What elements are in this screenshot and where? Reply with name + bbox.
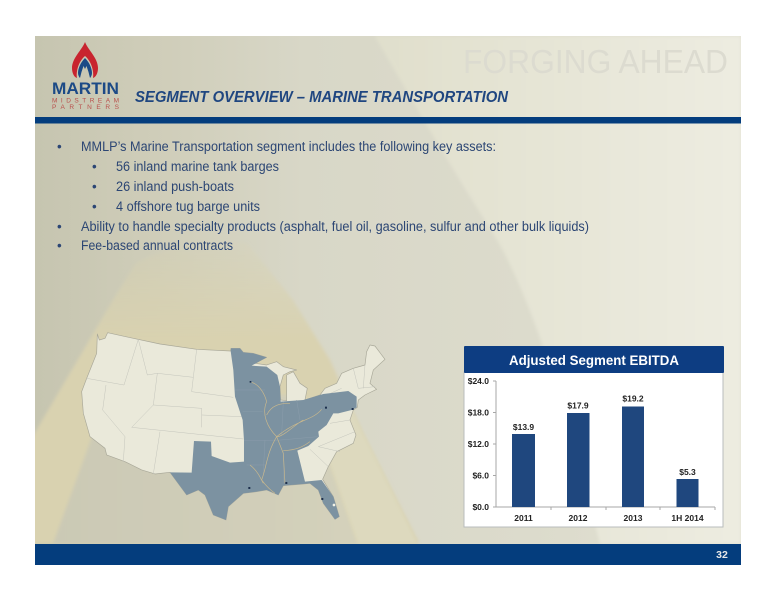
category labels: 1H 2014 bbox=[671, 513, 704, 523]
value labels bbox=[513, 394, 696, 477]
map: served states bbox=[170, 348, 357, 520]
bullet 2: Ability to handle specialty products (asphalt, fuel oil, gasoline, sulfur and other bulk liquids) bbox=[81, 219, 589, 234]
logo wordmark: MARTIN bbox=[52, 80, 119, 98]
sub-bullet 3: • bbox=[92, 199, 97, 214]
page number: 32 bbox=[716, 549, 728, 561]
axes bbox=[493, 381, 715, 510]
category labels bbox=[514, 513, 704, 523]
bullet list bbox=[57, 139, 589, 253]
y axis labels: $18.0 bbox=[468, 408, 489, 418]
chart background bbox=[464, 372, 723, 527]
map: contiguous US bbox=[82, 333, 385, 520]
sub-bullet 1: • bbox=[92, 159, 97, 174]
value labels: $19.2 bbox=[622, 394, 644, 404]
watermark title: FORGING AHEAD bbox=[463, 43, 728, 80]
bullet 3: Fee-based annual contracts bbox=[81, 238, 233, 253]
sub-bullet 2: • bbox=[92, 179, 97, 194]
bullet 2: • bbox=[57, 219, 62, 234]
y axis labels: $0.0 bbox=[472, 502, 489, 512]
map: state lines bbox=[87, 339, 375, 474]
logo subtitle line 2: PARTNERS bbox=[52, 104, 120, 111]
heading: SEGMENT OVERVIEW – MARINE TRANSPORTATION bbox=[135, 89, 508, 106]
bullet 1: MMLP’s Marine Transportation segment includes the following key assets: bbox=[81, 139, 496, 154]
logo bbox=[52, 42, 120, 111]
chart header bbox=[464, 346, 724, 373]
value labels: $17.9 bbox=[567, 400, 589, 410]
category labels: 2011 bbox=[514, 513, 533, 523]
sub-bullet 2: 26 inland push-boats bbox=[116, 179, 234, 194]
footer bar bbox=[35, 544, 741, 565]
value labels: $13.9 bbox=[513, 422, 534, 432]
y axis labels: $24.0 bbox=[468, 376, 489, 386]
map: white marker bbox=[333, 504, 335, 506]
map: waterways bbox=[250, 382, 322, 493]
map: state lines in served area bbox=[235, 390, 318, 483]
map: terminal markers bbox=[248, 381, 354, 500]
icon: flame bbox=[72, 42, 98, 78]
y axis labels: $12.0 bbox=[468, 439, 489, 449]
bars bbox=[512, 406, 698, 507]
y axis labels: $6.0 bbox=[472, 470, 489, 480]
sub-bullet 3: 4 offshore tug barge units bbox=[116, 199, 260, 214]
value labels: $5.3 bbox=[679, 467, 696, 477]
header bar bbox=[35, 117, 741, 124]
chart panel bbox=[464, 346, 724, 527]
bullet 1: • bbox=[57, 139, 62, 154]
US map bbox=[82, 333, 385, 520]
sub-bullet 1: 56 inland marine tank barges bbox=[116, 159, 279, 174]
bullet 3: • bbox=[57, 238, 62, 253]
logo subtitle: MIDSTREAM bbox=[52, 98, 119, 105]
category labels: 2013 bbox=[624, 513, 643, 523]
y axis labels bbox=[468, 376, 489, 512]
chart title: Adjusted Segment EBITDA bbox=[509, 353, 679, 368]
category labels: 2012 bbox=[569, 513, 588, 523]
